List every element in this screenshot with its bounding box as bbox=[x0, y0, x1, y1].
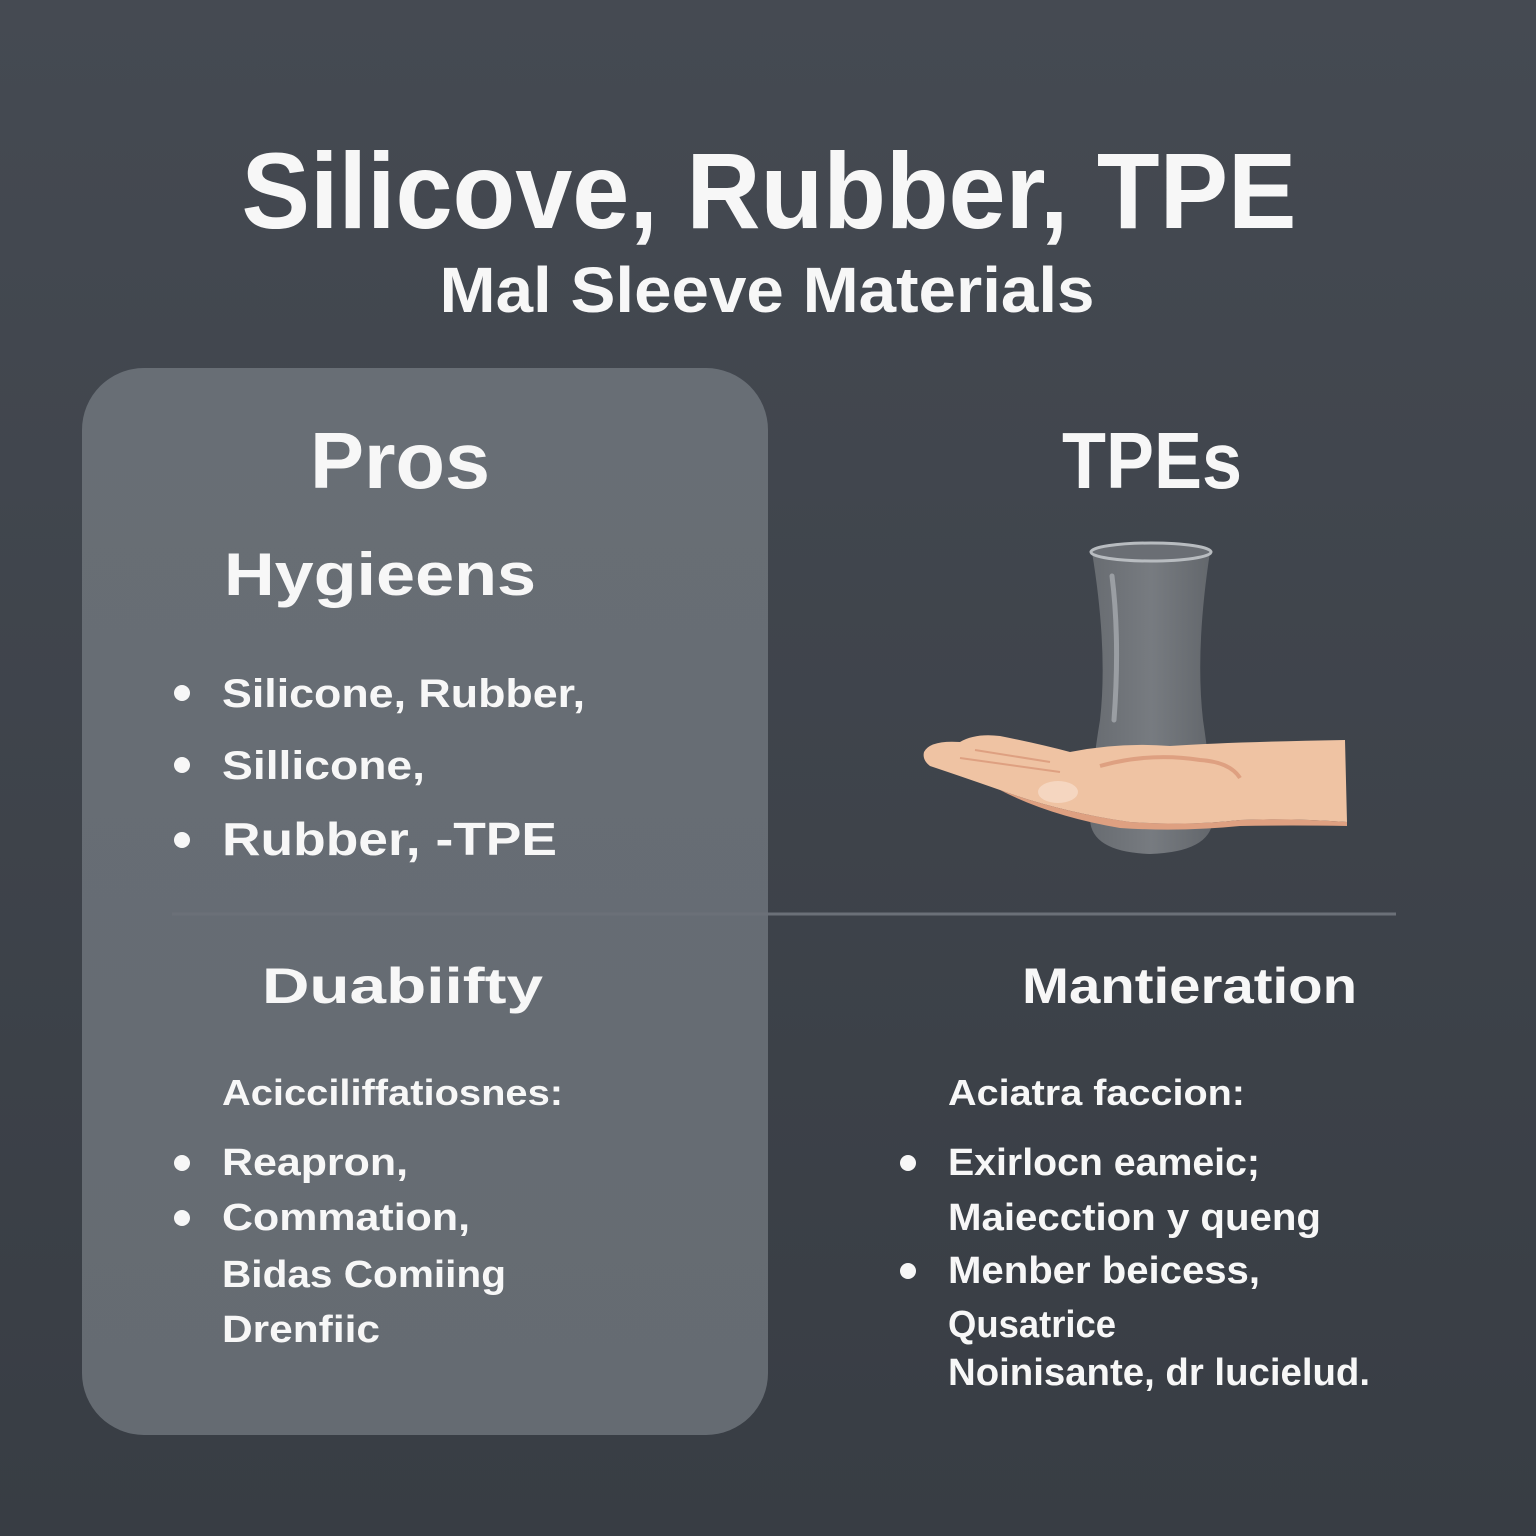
bullet list: materials bbox=[174, 672, 585, 865]
text block: maintenance list: Qusatrice bbox=[948, 1304, 1116, 1346]
text block: maintenance list: Maiecction y queng bbox=[948, 1197, 1321, 1239]
bullet list: materials: Silicone, Rubber, bbox=[222, 672, 585, 716]
text block: durability list: Drenfiic bbox=[222, 1309, 380, 1351]
text block: durability list bbox=[174, 1072, 563, 1351]
heading: tpes: TPEs bbox=[1062, 416, 1242, 505]
subtitle: Mal Sleeve Materials bbox=[440, 254, 1094, 326]
subheading: hygieens: Hygieens bbox=[224, 541, 536, 608]
bullet list: materials: Sillicone, bbox=[222, 744, 425, 788]
icon: sleeve in hand bbox=[924, 543, 1347, 854]
title: Silicove, Rubber, TPE bbox=[242, 130, 1296, 251]
text block: durability list: Commation, bbox=[222, 1197, 470, 1239]
divider bbox=[172, 912, 1396, 916]
text block: maintenance list: Exirlocn eameic; bbox=[948, 1142, 1260, 1184]
text block: durability list: Reapron, bbox=[222, 1142, 408, 1184]
bullet list: materials: Rubber, -TPE bbox=[222, 813, 557, 865]
subheading: mantieration: Mantieration bbox=[1022, 958, 1357, 1014]
subheading: duabiifty: Duabiifty bbox=[262, 958, 543, 1014]
text block: maintenance list: Menber beicess, bbox=[948, 1250, 1260, 1292]
panel: pros bbox=[82, 368, 768, 1435]
text block: durability list: Bidas Comiing bbox=[222, 1254, 506, 1296]
text block: durability list: Acicciliffatiosnes: bbox=[222, 1072, 563, 1113]
text block: maintenance list: Aciatra faccion: bbox=[948, 1072, 1245, 1113]
text block: maintenance list: Noinisante, dr lucielud. bbox=[948, 1352, 1370, 1394]
heading: pros: Pros bbox=[310, 416, 490, 505]
text block: maintenance list bbox=[900, 1072, 1370, 1394]
